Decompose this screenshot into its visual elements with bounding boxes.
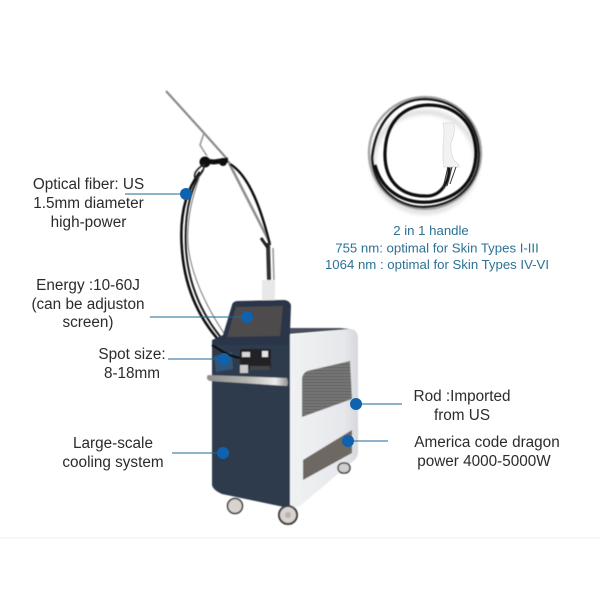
callout: rod: from US	[434, 407, 490, 424]
vent upper	[302, 361, 352, 417]
callout: optical fiber	[33, 176, 192, 231]
callout: energy: screen)	[62, 314, 114, 331]
inset ring	[369, 97, 481, 209]
callout: power	[342, 434, 560, 470]
screen	[227, 306, 283, 337]
inset shadow	[373, 112, 477, 212]
callout: energy: Energy :10-60J	[36, 277, 140, 294]
callout: cooling system: cooling system	[62, 454, 164, 471]
inset handpiece	[443, 123, 459, 167]
machine	[166, 91, 358, 524]
callout: energy	[31, 277, 253, 331]
inset caption	[325, 223, 549, 272]
inset: 2 in 1 handle	[369, 97, 481, 212]
callout: cooling system: Large-scale	[73, 435, 153, 452]
callout: optical fiber: high-power	[51, 214, 126, 231]
callout: rod	[350, 388, 510, 424]
callout: energy: (can be adjuston	[31, 296, 145, 313]
callout: spot size: Spot size:	[98, 346, 166, 363]
top edge	[288, 328, 350, 334]
callout: power: power 4000-5000W	[417, 453, 551, 470]
rear wheel	[338, 463, 350, 473]
inset caption: 755 nm: optimal for Skin Types I-III	[335, 240, 539, 256]
callout: spot size: 8-18mm	[104, 365, 160, 382]
control panel	[212, 345, 271, 373]
callout: spot size	[98, 346, 230, 382]
callout: rod: Rod :Imported	[414, 388, 510, 405]
callout: optical fiber: Optical fiber: US	[33, 176, 144, 193]
chrome handle bar	[207, 375, 288, 386]
callout: optical fiber: 1.5mm diameter	[33, 195, 144, 212]
inset caption: 1064 nm : optimal for Skin Types IV-VI	[325, 257, 549, 272]
handpiece holder	[262, 280, 275, 300]
inset caption: 2 in 1 handle	[393, 223, 469, 238]
dark front body	[212, 333, 290, 508]
white side panel	[290, 329, 358, 508]
callout: cooling system	[62, 435, 229, 471]
screen head	[212, 300, 291, 345]
vent lower	[303, 430, 352, 480]
front wheels	[228, 498, 297, 524]
arm and fiber cables	[166, 91, 274, 355]
callout: power: America code dragon	[414, 434, 560, 451]
